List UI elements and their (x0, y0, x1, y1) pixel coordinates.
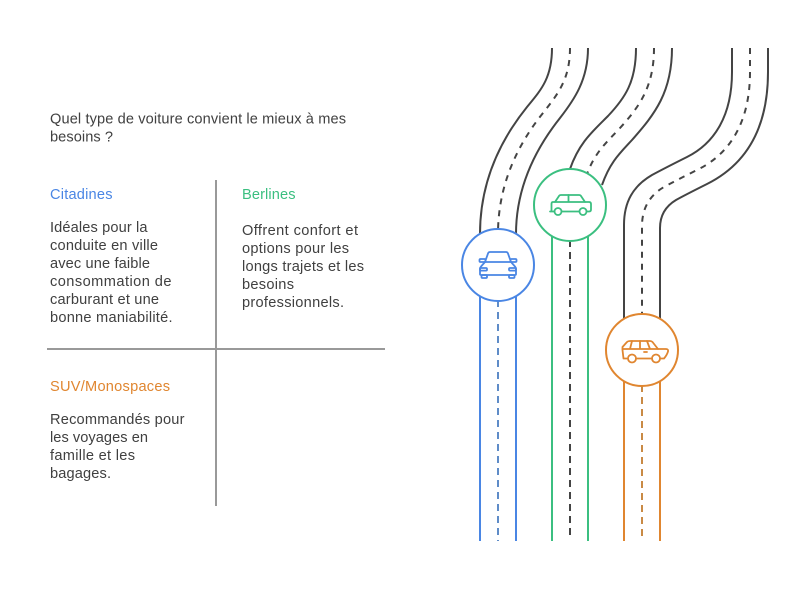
road: blue route (480, 48, 588, 541)
heading: berlines: Berlines (242, 187, 296, 203)
text block: berlines: professionnels. (242, 295, 344, 311)
text block: suv monospaces: les voyages en (50, 430, 148, 446)
text block: suv monospaces: Recommandés pour (50, 412, 185, 428)
title: besoins ? (50, 130, 113, 146)
title: Quel type de voiture convient le mieux à mes (50, 112, 346, 128)
marker: berlines car (534, 169, 606, 241)
text block: berlines: longs trajets et les (242, 259, 364, 275)
text block: berlines: besoins (242, 277, 294, 293)
text block: citadines: bonne maniabilité. (50, 310, 172, 326)
panel: berlines (242, 187, 364, 311)
icon: front view car (480, 252, 516, 278)
text block: citadines (50, 220, 172, 326)
text block: citadines: Idéales pour la (50, 220, 148, 236)
text block: citadines: carburant et une (50, 292, 159, 308)
text block: suv monospaces: famille et les (50, 448, 135, 464)
icon: estate car (622, 341, 668, 362)
heading: citadines: Citadines (50, 187, 112, 203)
marker: suv car (606, 314, 678, 386)
title (50, 112, 346, 146)
text block: berlines (242, 223, 364, 311)
road: orange route (624, 48, 768, 541)
text block: citadines: avec une faible (50, 256, 150, 272)
icon: sedan car (550, 195, 591, 215)
quadrant divider lines (47, 180, 385, 506)
panel: suv monospaces (50, 379, 185, 482)
text block: berlines: options pour les (242, 241, 349, 257)
text block: citadines: conduite en ville (50, 238, 158, 254)
text block: suv monospaces: bagages. (50, 466, 111, 482)
text block: suv monospaces (50, 412, 185, 482)
marker: citadines car (462, 229, 534, 301)
text block: berlines: Offrent confort et (242, 223, 358, 239)
panel: citadines (50, 187, 172, 326)
road: green route (552, 48, 672, 541)
text block: citadines: consommation de (50, 274, 172, 290)
heading: suv monospaces: SUV/Monospaces (50, 379, 170, 395)
